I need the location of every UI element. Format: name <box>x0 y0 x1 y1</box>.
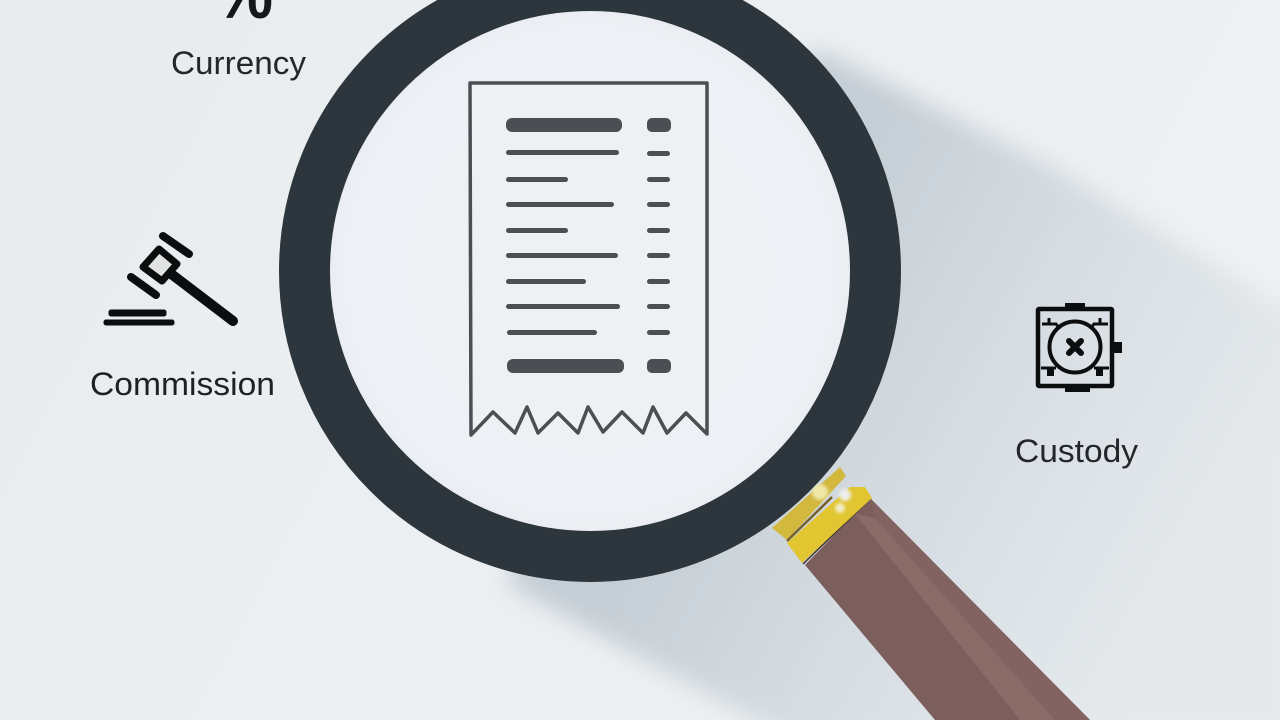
label: Custody: Custody <box>1015 433 1138 469</box>
receipt header row <box>506 118 671 132</box>
receipt line items <box>506 150 670 335</box>
label: Currency: Currency <box>171 45 306 81</box>
metal ferrule <box>772 467 872 563</box>
magnifier cast shadow <box>505 48 1280 720</box>
icon: vault safe <box>1038 303 1122 392</box>
label: Commission: Commission <box>90 366 275 402</box>
magnifying glass <box>304 0 1090 720</box>
receipt outline <box>470 83 707 435</box>
receipt total row <box>507 359 671 373</box>
icon: gavel <box>104 236 233 325</box>
handle <box>803 498 1090 720</box>
receipt <box>470 83 707 435</box>
lens ring <box>304 0 876 556</box>
